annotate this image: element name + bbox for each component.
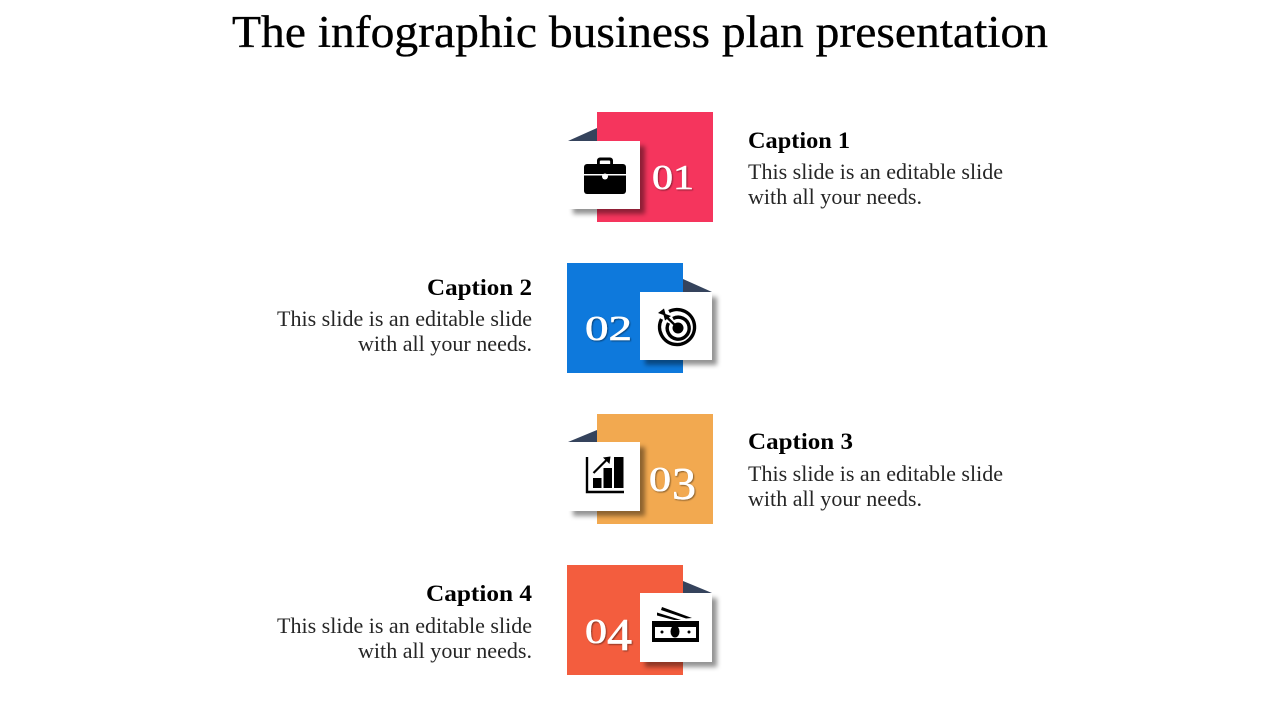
step 1 fold bbox=[568, 128, 597, 141]
step 2 icon card bbox=[640, 292, 712, 360]
caption 2: with all your needs. bbox=[358, 331, 532, 356]
caption 3: with all your needs. bbox=[748, 486, 922, 511]
caption 2: This slide is an editable slide bbox=[277, 306, 532, 331]
step 3 block bbox=[568, 414, 713, 524]
caption 2 bbox=[277, 275, 532, 356]
step 4 block bbox=[567, 565, 712, 675]
icon: bar chart bbox=[587, 456, 624, 492]
step 4 number: 4 bbox=[607, 609, 632, 660]
icon: banknotes bbox=[652, 607, 699, 642]
step 2 colour panel bbox=[567, 263, 683, 373]
caption 4 bbox=[277, 581, 533, 663]
step 3 colour panel bbox=[597, 414, 713, 524]
step 4 icon card bbox=[640, 593, 712, 662]
caption 1: with all your needs. bbox=[748, 184, 922, 209]
step 1 colour panel bbox=[597, 112, 713, 222]
step 4 colour panel bbox=[567, 565, 683, 675]
step 1 block bbox=[568, 112, 713, 222]
step 3 number bbox=[649, 458, 696, 509]
caption 1: Caption 1 bbox=[748, 128, 850, 153]
step 2 block bbox=[567, 263, 712, 373]
step 3 number: 0 bbox=[649, 460, 671, 499]
step 1 number: 01 bbox=[652, 158, 694, 197]
caption 1: This slide is an editable slide bbox=[748, 159, 1003, 184]
caption 1 bbox=[748, 128, 1003, 209]
step 2 number: 02 bbox=[585, 309, 632, 348]
step 4 number bbox=[585, 609, 632, 660]
caption 4: Caption 4 bbox=[426, 581, 533, 606]
icon: briefcase bbox=[584, 158, 626, 194]
title: The infographic business plan presentation bbox=[232, 7, 1048, 57]
step 3 icon card bbox=[568, 442, 640, 511]
caption 3: This slide is an editable slide bbox=[748, 461, 1003, 486]
step 3 number: 3 bbox=[672, 458, 696, 509]
caption 2: Caption 2 bbox=[427, 275, 532, 300]
step 4 fold bbox=[683, 581, 712, 593]
step 2 fold bbox=[683, 279, 712, 292]
caption 4: with all your needs. bbox=[358, 638, 532, 663]
caption 3 bbox=[748, 429, 1003, 511]
icon: target bbox=[658, 308, 695, 345]
step 1 icon card bbox=[568, 141, 640, 209]
step 3 fold bbox=[568, 430, 597, 442]
caption 4: This slide is an editable slide bbox=[277, 613, 532, 638]
step 4 number: 0 bbox=[585, 612, 607, 651]
caption 3: Caption 3 bbox=[748, 429, 853, 454]
